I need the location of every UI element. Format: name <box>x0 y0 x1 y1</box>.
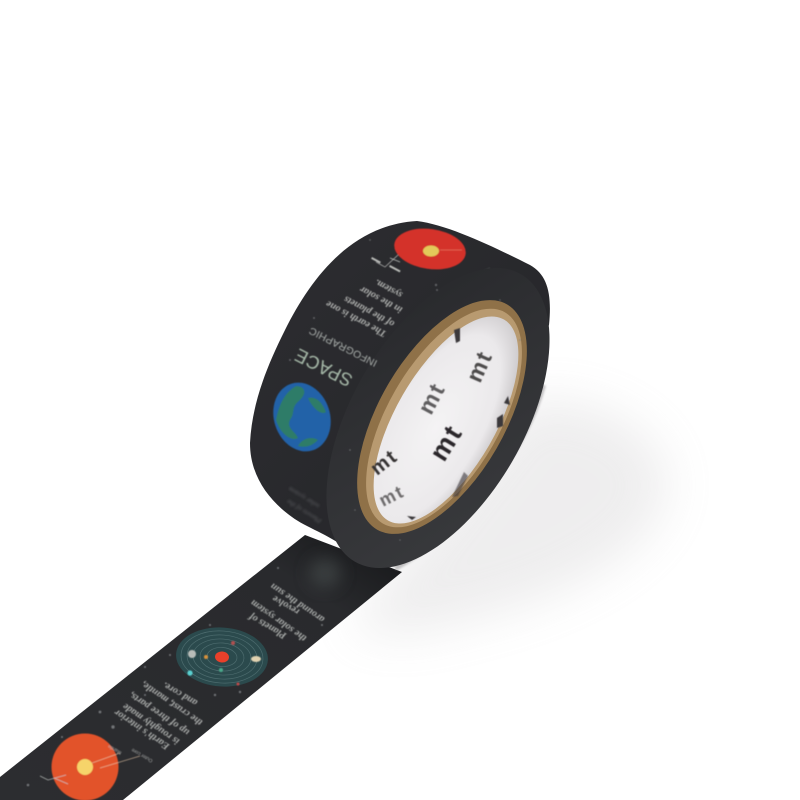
solar system planets <box>187 641 261 686</box>
mt logos: mt <box>412 378 450 418</box>
earth description text: system. <box>373 276 405 301</box>
earth interior text block: up of three parts, <box>127 689 192 738</box>
roll contact shadow <box>395 385 543 568</box>
earth interior diagram: Mantle <box>107 743 123 755</box>
white inner hole <box>345 295 547 545</box>
earth interior text block <box>112 678 205 752</box>
dark reflection on strip <box>309 558 341 588</box>
cast shadow on white surface <box>350 400 668 634</box>
earth description text: of the planets <box>342 293 396 329</box>
strip star speckles <box>27 567 323 786</box>
roll outer body <box>250 221 550 548</box>
faint text on lower body: Planets of the <box>285 497 323 525</box>
planets text block <box>246 580 327 644</box>
earth icon <box>265 375 339 459</box>
earth interior text block: is roughly made <box>120 700 182 747</box>
planets text block: revolve <box>270 592 302 617</box>
red planet cross section <box>371 224 468 274</box>
earth interior text block: and core. <box>161 679 200 708</box>
planets text block: the solar system <box>249 597 309 644</box>
roll body highlight edge <box>395 268 490 345</box>
earth interior text block: the crust, mantle, <box>139 678 205 728</box>
mt logos: mt <box>461 346 498 386</box>
core inner shade <box>335 284 553 552</box>
solar system diagram <box>174 624 270 690</box>
planets text block: around the sun <box>268 580 327 625</box>
earth interior text block: Earth's interior <box>112 707 173 752</box>
mt logos: mt <box>376 481 408 511</box>
kraft cardboard core <box>322 273 562 561</box>
faint text on lower body: solar system <box>287 484 322 511</box>
faint text on lower body <box>285 484 323 525</box>
earth interior diagram <box>40 734 154 800</box>
mt logos: mt <box>367 445 402 480</box>
earth interior diagram: Outer core <box>130 746 154 763</box>
infographic subtitle: INFOGRAPHIC <box>307 324 379 369</box>
earth description text: The earth is one <box>324 298 388 339</box>
space title: SPACE <box>291 344 356 390</box>
planets text block: Planets of <box>246 610 288 641</box>
mt logos <box>367 346 498 511</box>
earth description text <box>324 276 405 339</box>
partial logo marks at hole edge <box>407 328 510 520</box>
roll side face <box>281 231 595 605</box>
tape strip <box>0 535 402 800</box>
earth description text: in the solar <box>358 283 404 315</box>
body star speckles <box>289 239 521 541</box>
tape roll <box>250 221 595 605</box>
mt logos: mt <box>424 419 469 466</box>
